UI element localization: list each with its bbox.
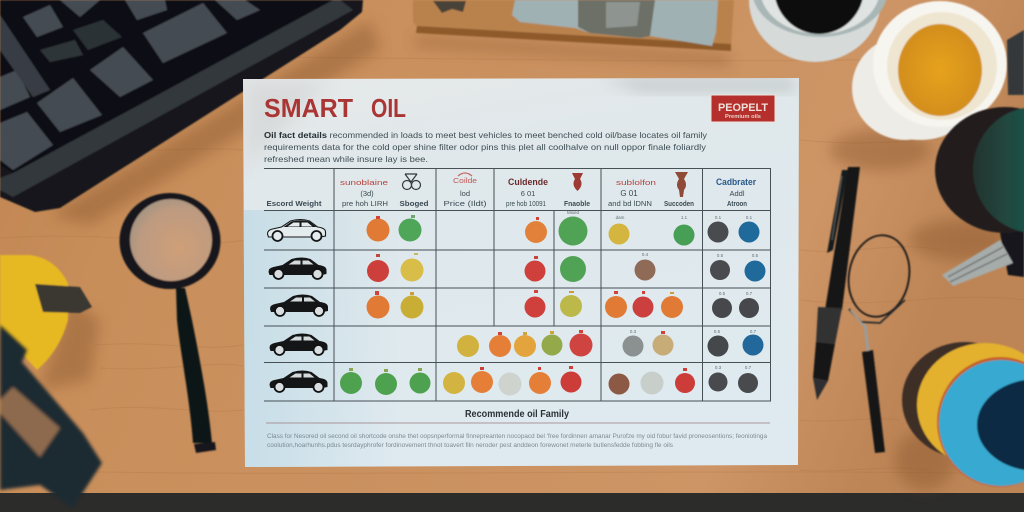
dot micro labels: [567, 210, 759, 370]
title: SMART: [264, 93, 353, 123]
badge: [711, 95, 775, 122]
dot micro labels: 1.1: [681, 215, 688, 220]
table header: Atroon: [727, 199, 747, 208]
intro text: [264, 131, 708, 164]
intro text: requirements data for the cold oper shine filter odor pins this plet all coolhalve on null oppor finale foliardly: [264, 143, 707, 152]
row 1 dots: [366, 215, 760, 246]
dot micro labels: 0.1: [715, 215, 722, 220]
dot micro labels: 0.4: [642, 252, 649, 257]
row car icons: [268, 220, 328, 392]
yellow object, left: [0, 255, 92, 370]
row 3 dots: [366, 290, 759, 318]
badge: Premium oils: [725, 114, 761, 120]
row 5 dots: [340, 366, 758, 396]
table header: (3d): [360, 189, 374, 198]
dot micro labels: 0.5: [717, 253, 724, 258]
table header: pre hoh LIRH: [342, 199, 388, 208]
table header: Fnaoble: [564, 199, 590, 208]
row 4 dots: [457, 330, 764, 357]
title: OIL: [371, 93, 406, 123]
table header: lod: [460, 189, 470, 198]
footer note: [267, 433, 767, 449]
dot micro labels: 0.7: [750, 329, 757, 334]
table header: [266, 177, 756, 208]
dot micro labels: 0.5: [719, 291, 726, 296]
pen: [813, 167, 860, 400]
table header: Sboged: [400, 199, 429, 208]
table header: Coilde: [453, 178, 477, 185]
table header: Addl: [729, 189, 745, 198]
badge: PEOPELT: [718, 102, 768, 114]
dot micro labels: 0.3: [715, 365, 722, 370]
table header: pre hob 10091: [506, 199, 546, 208]
intro text: Oil fact details recommended in loads to meet best vehicles to meet benched cold oil/base locates oil family: [264, 131, 708, 140]
table header: Cadbrater: [716, 177, 756, 187]
table header: Price (Ildt): [444, 199, 487, 208]
table header: Escord Weight: [266, 199, 322, 208]
camera, bottom left: [0, 325, 102, 508]
table header: sublolfon: [616, 178, 656, 187]
dot micro labels: 0.7: [746, 291, 753, 296]
tea mug: [852, 1, 1007, 140]
coffee cup: [749, 0, 888, 62]
magnifying glass: [120, 193, 220, 453]
paper sheet: [240, 78, 799, 467]
car row 1: [268, 220, 326, 241]
dot micro labels: dam: [616, 215, 625, 220]
table header: Culdende: [508, 177, 548, 187]
recommended oil family caption: Recommende oil Family: [465, 409, 569, 420]
black wire loop and stylus: [842, 230, 916, 453]
table header: 6 01: [521, 189, 535, 198]
dot micro labels: 0.1: [746, 215, 753, 220]
dot micro labels: 0.5: [714, 329, 721, 334]
table header: Succoden: [664, 199, 694, 208]
dark camera lens, right: [935, 30, 1024, 286]
intro text: refreshed mean while insure lay is bee.: [264, 155, 428, 164]
table header: G 01: [620, 189, 638, 198]
car row 2: [268, 258, 326, 279]
title: [264, 93, 406, 123]
wood board with metal plate: [413, 0, 734, 51]
footer note: Class for Nesored oil second oil shortcode onshe thet oopsnperformal finnepreanten nocopacd bel 'free fordinnen amanar Purofze my oid fobur favid proneosentions; feoniotinga: [267, 433, 767, 440]
divider rule: [266, 422, 770, 424]
car row 4: [270, 334, 328, 355]
oil colour dots: [340, 215, 766, 396]
coloured roll, bottom right: [902, 342, 1024, 487]
dot micro labels: 0.3: [630, 329, 637, 334]
table header: sunoblaine: [340, 178, 388, 187]
dot micro labels: 0.5: [752, 253, 759, 258]
header icons: [402, 172, 688, 197]
keyboard: [0, 0, 363, 212]
row 2 dots: [367, 253, 766, 282]
table header: and bd lDNN: [608, 199, 652, 208]
car row 5: [270, 370, 328, 392]
footer note: coolution,hoarhunhs.pdus tesrdayphrofer fordinovement thnot toavert filn neroder pest anddeon forewonet meterle butlensfedde fobbing fle oils: [267, 442, 674, 449]
dot micro labels: 0.7: [745, 365, 752, 370]
oil table grid: [264, 168, 771, 401]
car row 3: [270, 294, 328, 316]
dot micro labels: Mixed: [567, 210, 579, 215]
